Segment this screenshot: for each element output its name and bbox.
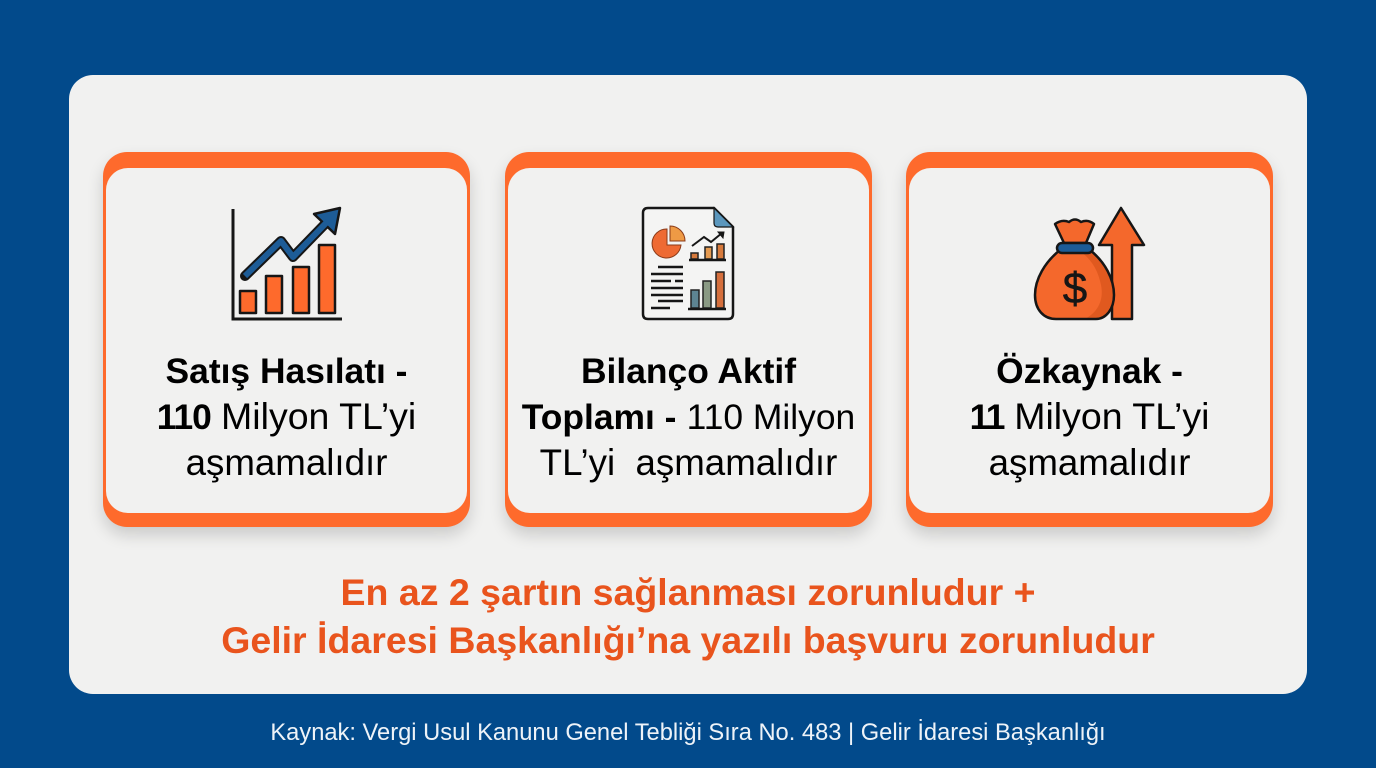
card inner surface	[909, 168, 1270, 513]
text: balance sheet condition: Bilanço Aktif Toplamı - 110 Milyon TL’yi aşmamalıdır	[522, 351, 855, 483]
card: balance sheet assets	[505, 152, 872, 527]
main panel	[69, 75, 1307, 694]
card: equity	[906, 152, 1273, 527]
icon: growth bar chart	[232, 206, 342, 320]
text: sales revenue condition: Satış Hasılatı - 110 Milyon TL’yi aşmamalıdır	[157, 351, 416, 483]
source footer: Kaynak: Vergi Usul Kanunu Genel Tebliği Sıra No. 483 | Gelir İdaresi Başkanlığı	[270, 720, 1106, 746]
text: equity condition: Özkaynak - 11 Milyon TL’yi aşmamalıdır	[970, 351, 1209, 483]
dollar sign: $	[1063, 264, 1087, 313]
callout: requirement statement: En az 2 şartın sağlanması zorunludur + Gelir İdaresi Başkanlığı’na yazılı başvuru zorunludur	[221, 571, 1155, 661]
icon: money bag and arrow	[1034, 206, 1146, 320]
card inner surface	[106, 168, 467, 513]
card inner surface	[508, 168, 869, 513]
card: sales revenue	[103, 152, 470, 527]
icon: report document	[642, 206, 734, 320]
